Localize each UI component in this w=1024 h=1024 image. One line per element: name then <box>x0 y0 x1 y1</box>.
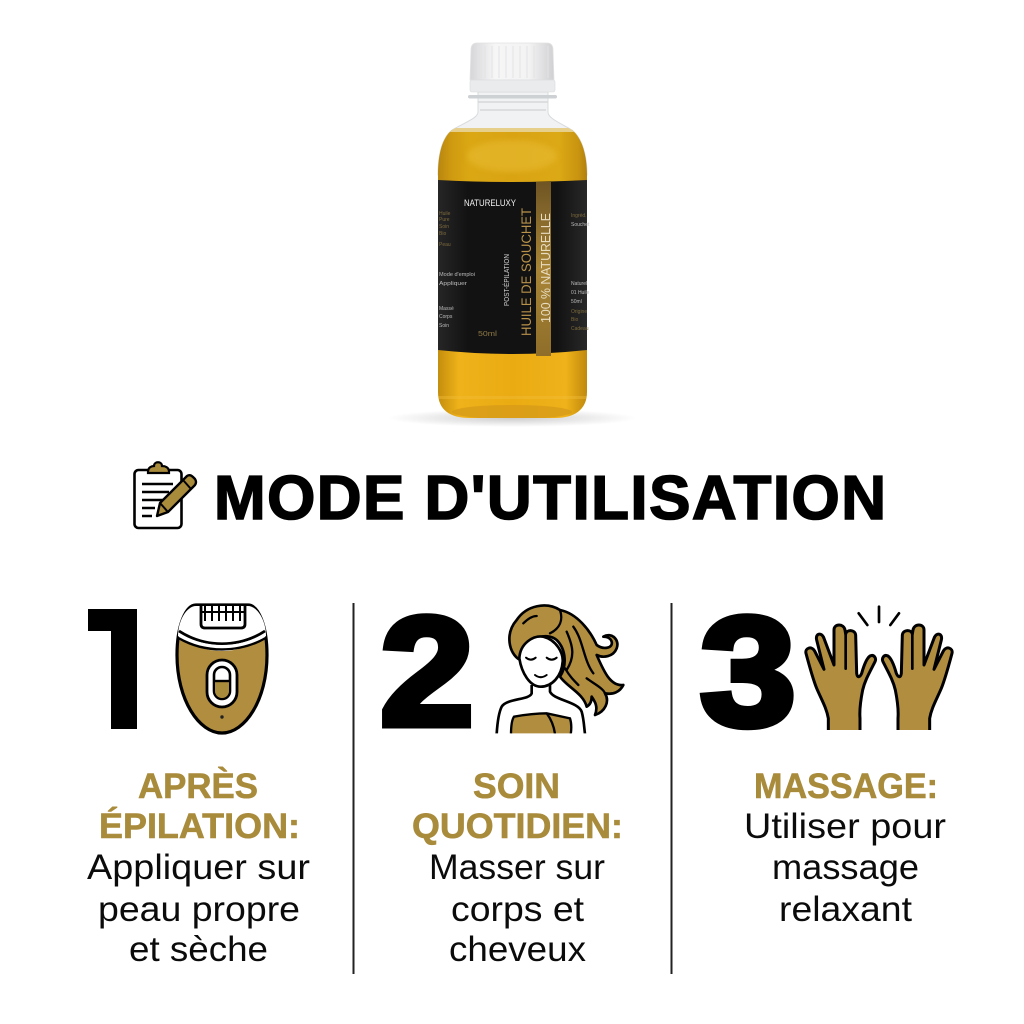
step 1 title: APRÈS <box>138 766 258 806</box>
cap ribs <box>478 46 548 78</box>
panel: step 1 <box>87 585 310 969</box>
left small print: Bio <box>439 231 446 237</box>
sparkle lines <box>859 607 899 625</box>
left small print: Peau <box>439 242 451 248</box>
usage tag: POST-ÉPILATION <box>502 254 511 306</box>
left small print <box>439 211 475 329</box>
panel: step 3 <box>700 585 952 929</box>
neck ring highlight <box>478 102 548 110</box>
step 3 description: relaxant <box>779 890 912 929</box>
left hand <box>806 625 876 733</box>
right small print <box>571 213 590 332</box>
gold stripe <box>536 182 551 356</box>
icon: epilator <box>177 605 267 733</box>
icon: hands <box>806 607 952 733</box>
step 2 title: QUOTIDIEN: <box>412 807 623 846</box>
right hand <box>882 625 952 733</box>
left small print: Soin <box>439 323 449 329</box>
step 2 description <box>429 848 605 969</box>
number 1: 1 <box>88 585 160 758</box>
divider <box>352 603 354 974</box>
step 2 title: SOIN <box>473 767 560 806</box>
right small print: 50ml <box>571 299 582 305</box>
left small print: Corps <box>439 314 453 320</box>
bottle shadow <box>387 409 637 427</box>
number 1 <box>88 609 137 729</box>
right small print: Ingréd. <box>571 213 587 219</box>
bottle oil <box>436 128 589 420</box>
cap band <box>470 80 555 92</box>
right small print: Origine <box>571 309 587 315</box>
step 1 description: Appliquer sur <box>87 848 310 887</box>
step 3 description: Utiliser pour <box>744 807 946 846</box>
bottle neck and shoulders <box>438 92 587 175</box>
step 2 description: Masser sur <box>429 848 605 887</box>
left small print: Mode d'emploi <box>439 272 475 278</box>
step 2 title <box>412 767 623 846</box>
face <box>519 636 563 687</box>
icon: woman with hair <box>497 606 623 735</box>
bottle cap <box>470 43 554 80</box>
panel: step 2 <box>380 585 623 969</box>
bottle photo <box>408 42 616 426</box>
heading: mode d'utilisation <box>134 462 886 533</box>
hair <box>509 606 623 715</box>
step 1 title <box>99 766 300 846</box>
left small print: Huile <box>439 211 451 217</box>
hair strands <box>523 610 605 693</box>
towel <box>511 713 571 735</box>
left small print: Pure <box>439 217 450 223</box>
step 3 title: MASSAGE: <box>754 767 938 806</box>
step 1 title: ÉPILATION: <box>99 806 300 846</box>
icon: clipboard and pencil <box>134 462 196 528</box>
volume: 50ml <box>478 331 498 338</box>
right small print: Naturel <box>571 281 587 287</box>
neck and shoulders <box>497 685 585 734</box>
step 1 description <box>87 848 310 969</box>
right small print: Bio <box>571 317 578 323</box>
right small print: 01 Huile <box>571 290 590 296</box>
heading text: MODE D'UTILISATION <box>214 464 886 533</box>
label <box>438 180 590 356</box>
right small print: Souchet <box>571 222 590 228</box>
right small print: Cadeau <box>571 326 589 332</box>
number 2: 2 <box>380 585 474 758</box>
divider <box>670 603 672 974</box>
left small print: Soin <box>439 224 449 230</box>
step 2 description: cheveux <box>449 930 587 969</box>
step 3 description <box>744 807 946 929</box>
closed eyes and smile <box>526 658 557 677</box>
step 2 description: corps et <box>451 890 584 929</box>
left small print: Appliquer <box>439 281 467 287</box>
left small print: Massé <box>439 306 454 312</box>
bottle collar <box>468 95 557 98</box>
step 3 description: massage <box>772 848 919 887</box>
product name: HUILE DE SOUCHET <box>518 208 534 336</box>
brand: NATURELUXY <box>464 198 516 208</box>
natural claim: 100 % NATURELLE <box>538 213 553 323</box>
number 3: 3 <box>700 585 796 758</box>
step 1 description: et sèche <box>129 930 268 969</box>
step 1 description: peau propre <box>98 890 300 929</box>
